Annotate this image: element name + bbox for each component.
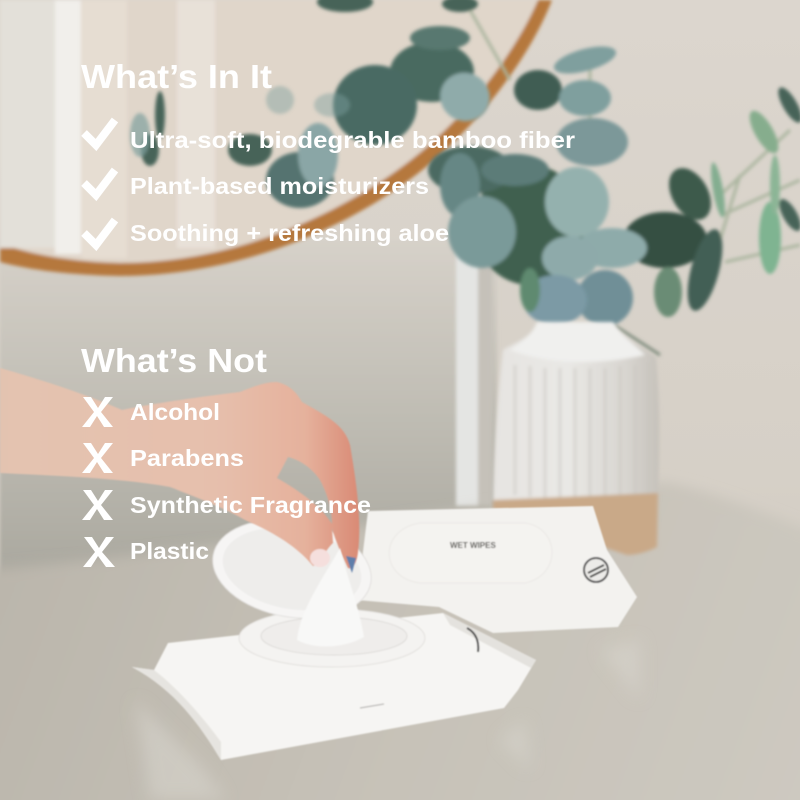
excluded 1: Alcohol — [130, 399, 220, 425]
pale leaves — [130, 41, 784, 326]
dispenser ring — [239, 609, 425, 667]
excluded 3: Synthetic Fragrance — [130, 492, 371, 518]
pack logo — [467, 628, 478, 652]
back pack icon — [584, 558, 608, 582]
hand — [0, 368, 359, 573]
counter reflections — [135, 640, 640, 800]
ingredient 2: Plant-based moisturizers — [130, 173, 429, 199]
back wipes pack — [357, 506, 637, 633]
top right seam — [443, 613, 536, 668]
x icon 1 — [82, 397, 113, 427]
stems — [470, 10, 800, 355]
x icon 2 — [82, 443, 113, 473]
check icon 3 — [84, 220, 115, 245]
vase — [493, 322, 659, 555]
front wipes pack — [132, 508, 536, 760]
pack url — [360, 704, 384, 708]
check icon 1 — [84, 120, 115, 145]
heading: what's not: What’s Not — [81, 342, 267, 379]
ingredient 1: Ultra-soft, biodegrable bamboo fiber — [130, 127, 575, 153]
x icon 4 — [83, 537, 115, 567]
open lid — [205, 508, 379, 630]
x icon 3 — [82, 490, 113, 520]
check icon 2 — [84, 170, 115, 195]
ingredient 3: Soothing + refreshing aloe — [130, 220, 449, 246]
excluded 2: Parabens — [130, 445, 244, 471]
dark leaves — [141, 0, 800, 314]
fingernail — [310, 549, 330, 567]
tissue — [297, 548, 364, 646]
mirror — [0, 0, 552, 276]
left wall shading — [0, 240, 497, 580]
heading: what's in it: What’s In It — [81, 58, 272, 95]
back pack label: WET WIPES — [450, 541, 496, 550]
excluded 4: Plastic — [130, 538, 209, 564]
left fold — [132, 667, 221, 760]
counter — [0, 482, 800, 800]
eucalyptus plant — [130, 0, 800, 355]
back pack lid — [389, 523, 552, 583]
wall column and shadow — [456, 250, 492, 506]
